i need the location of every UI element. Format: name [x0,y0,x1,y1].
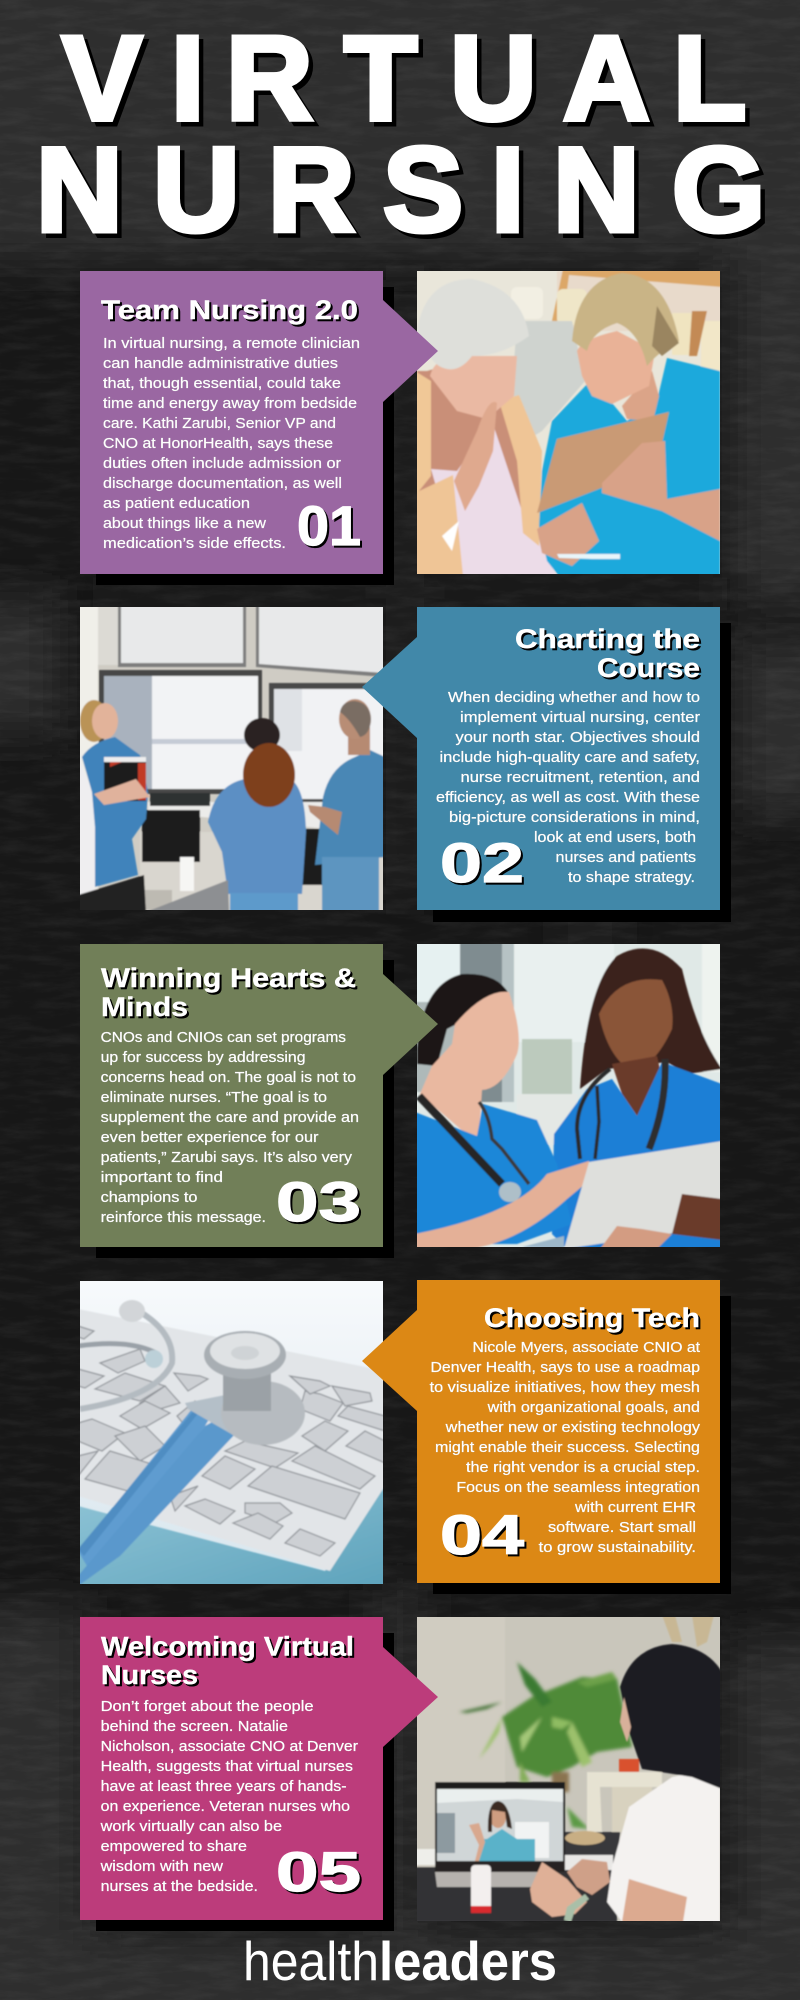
heading: Course [597,653,700,683]
heading: Welcoming Virtual [101,1632,354,1662]
title [36,12,770,262]
heading: Team Nursing 2.0 [101,295,358,325]
body text: work virtually can also be [99,1819,282,1835]
body text: nurse recruitment, retention, and [460,770,700,786]
body text: Denver Health, says to use a roadmap [430,1360,700,1376]
body text: care. Kathi Zarubi, Senior VP and [103,416,336,432]
body text: might enable their success. Selecting [435,1440,700,1456]
panel: purple callout [80,271,438,574]
body text: look at end users, both [534,830,696,846]
body text: as patient education [103,496,250,512]
panel: blue callout [362,607,720,910]
body text: important to find [101,1170,223,1186]
panel: orange callout [362,1280,720,1583]
chest piece [221,1381,305,1445]
body text [103,336,360,552]
number 02: 02 [440,831,524,894]
title shadow: VIRTUAL [66,16,751,150]
logo: healthleaders: health [243,1930,379,1992]
body text: Focus on the seamless integration [456,1480,700,1496]
heading: Choosing Tech [484,1303,700,1333]
body text: about things like a new [103,516,267,532]
body text: supplement the care and provide an [101,1110,359,1126]
body text: In virtual nursing, a remote clinician [103,336,360,352]
panel: magenta callout [80,1617,438,1920]
body text: duties often include admission or [103,456,341,472]
woman left [417,974,509,1066]
heading [515,624,700,683]
panel: green callout [80,944,438,1247]
ring [80,1309,172,1409]
body text: patients,” Zarubi says. It’s also very [101,1150,353,1166]
keys [78,1326,385,1556]
tube [78,1409,215,1571]
panel shadow [96,1633,394,1931]
mantel [587,1772,662,1832]
body text: whether new or existing technology [445,1420,701,1436]
body text: big-picture considerations in mind, [449,810,700,826]
heading: Nurses [101,1660,198,1690]
section 3: winning hearts and minds [80,942,722,1258]
body text [436,690,700,886]
body text: Don’t forget about the people [101,1699,314,1715]
woman [607,1767,720,1922]
body text: Nicole Myers, associate CNIO at [472,1340,700,1356]
clinician right [315,750,385,865]
title shadow [40,16,770,262]
body text: nurses and patients [556,850,696,866]
body text: implement virtual nursing, center [460,710,700,726]
floor and desk [140,832,385,912]
body text: with current EHR [574,1500,696,1516]
body text [430,1340,701,1556]
body text: wisdom with new [99,1859,224,1875]
body text: that, though essential, could take [103,376,341,392]
body text: include high-quality care and safety, [440,750,700,766]
section 2: charting the course [78,605,731,922]
body text: time and energy away from bedside [103,396,357,412]
heading: Winning Hearts & [101,963,356,993]
photo: stethoscope on keyboard [80,1281,383,1584]
body text: reinforce this message. [101,1210,266,1226]
bottle [471,1865,491,1913]
body text: CNO at HonorHealth, says these [103,436,333,452]
body text: When deciding whether and how to [448,690,700,706]
heading [101,1632,354,1690]
body text: champions to [101,1190,198,1206]
body text [101,1030,359,1226]
body text: empowered to share [101,1839,247,1855]
panel shadow [96,960,394,1258]
body text: concerns head on. The goal is not to [101,1070,356,1086]
body text: even better experience for our [101,1130,319,1146]
laptop [435,1782,565,1872]
body text: your north star. Objectives should [456,730,700,746]
body text: Nicholson, associate CNO at Denver [101,1739,358,1755]
table [565,1832,620,1869]
patient [417,361,537,574]
section 1: team nursing [80,269,723,585]
body text: behind the screen. Natalie [101,1719,288,1735]
panel shadow [433,623,731,922]
body text: with organizational goals, and [487,1400,700,1416]
body text: can handle administrative duties [103,356,338,372]
heading [101,963,356,1022]
body text: discharge documentation, as well [103,476,342,492]
body text: Health, suggests that virtual nurses [101,1759,353,1775]
clinician left [82,737,148,887]
body text: nurses at the bedside. [101,1879,258,1895]
body text: on experience. Veteran nurses who [101,1799,350,1815]
number 03: 03 [276,1170,361,1233]
woman right [580,948,722,1089]
body text: have at least three years of hands- [101,1779,347,1795]
heading: Minds [101,992,188,1022]
white coat [78,757,95,895]
nurse [539,358,720,576]
title shadow: NURSING [40,128,770,262]
plant [459,1662,632,1829]
number 05: 05 [276,1840,361,1903]
heading: Charting the [515,624,700,654]
photo: video call with nurse [417,1617,720,1921]
number 01: 01 [297,494,361,557]
body text: to visualize initiatives, how they mesh [430,1380,700,1396]
laptop [564,1141,722,1249]
panel shadow [433,1296,731,1594]
body text: medication’s side effects. [103,536,286,552]
title text [36,12,765,257]
panel shadow [96,287,394,585]
photo: clinicians at monitor wall [80,607,383,910]
photo: older patient and nurse with tablet [417,271,720,574]
title text: VIRTUAL [62,12,746,146]
body text: efficiency, as well as cost. With these [436,790,700,806]
title text: NURSING [36,123,765,257]
logo: healthleaders [243,1930,557,1992]
body text: CNOs and CNIOs can set programs [101,1030,346,1046]
logo: healthleaders: leaders [379,1930,557,1992]
clinician center [208,779,306,894]
section 5: welcoming virtual nurses [80,1615,722,1931]
body text [99,1699,358,1895]
body text: to shape strategy. [568,870,695,886]
foreground monitors [78,875,146,912]
body text: to grow sustainability. [539,1540,696,1556]
section 4: choosing tech [78,1280,731,1594]
photo: two nurses with laptop [417,944,720,1247]
body text: up for success by addressing [101,1050,305,1066]
body text: software. Start small [548,1520,696,1536]
body text: eliminate nurses. “The goal is to [101,1090,327,1106]
body text: the right vendor is a crucial step. [466,1460,700,1476]
number 04: 04 [440,1503,524,1566]
